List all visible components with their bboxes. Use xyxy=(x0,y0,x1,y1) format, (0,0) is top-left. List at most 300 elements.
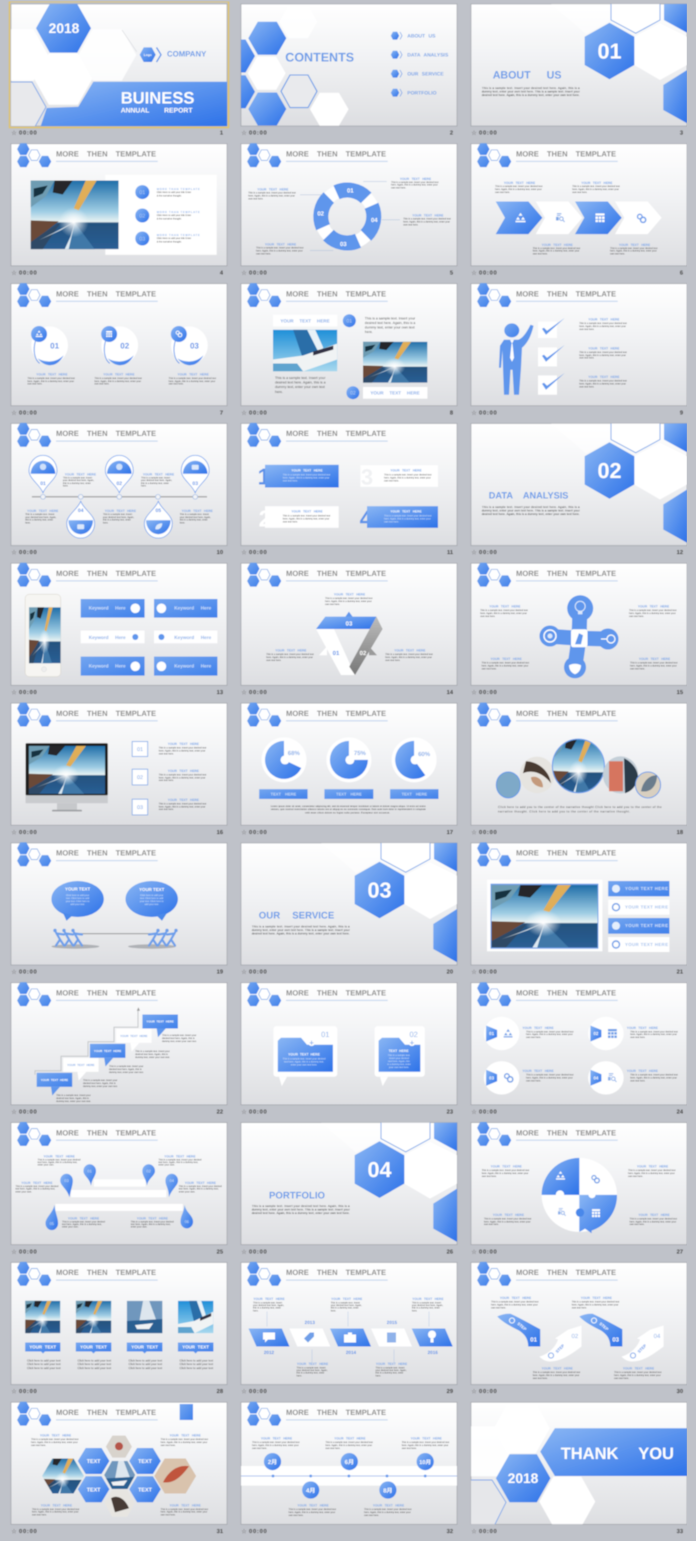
feature 03 xyxy=(484,1061,519,1094)
text block: this is a dummy text, enter xyxy=(253,1307,281,1310)
text block: own text here. xyxy=(325,603,340,606)
selection frame xyxy=(10,2,228,128)
card 2: own text here. xyxy=(283,520,298,524)
step notes 4 xyxy=(135,1050,170,1059)
slide footer xyxy=(472,1388,683,1395)
list item 02: MORE THAN TEMPLATE xyxy=(157,210,200,214)
slide footer: 00:00 xyxy=(19,270,37,276)
slide background xyxy=(241,284,457,406)
caption: narrative thought. Click here to add you to the center of the narrative thought. xyxy=(498,810,630,814)
slide footer: ☆ xyxy=(12,409,17,416)
ribbon step 04: 04 xyxy=(654,1333,661,1340)
text block: text here. Again, this is a dummy text, xyxy=(15,1188,55,1191)
text block: YOUR TEXT HERE xyxy=(253,1297,285,1301)
slide footer: 23 xyxy=(447,1109,453,1115)
text block: here. Again, this is a dummy text, enter your xyxy=(385,656,432,659)
hexagon cluster: TEXT xyxy=(87,1487,101,1493)
text block xyxy=(15,1181,59,1193)
text block xyxy=(248,188,296,200)
text block: YOUR TEXT HERE xyxy=(638,1213,670,1217)
text block: This is a sample text. Insert your desired text xyxy=(533,1371,580,1374)
number badge 02: 02 xyxy=(350,391,356,397)
text block: YOUR TEXT HERE xyxy=(297,1362,328,1366)
text block: This is a sample text. Insert your desired text xyxy=(159,773,207,776)
panel: slide 13 phone and buttons xyxy=(11,563,227,696)
paragraph right: here. xyxy=(365,330,373,334)
text block: This is a sample text. Insert xyxy=(25,513,55,516)
ribbon step 01 xyxy=(497,1314,540,1346)
text block: YOUR TEXT HERE xyxy=(412,1297,443,1301)
text block: text here. Again, this is a dummy text, xyxy=(131,1223,171,1226)
closing artwork xyxy=(470,1426,687,1525)
text block: enter your own. xyxy=(179,1190,196,1193)
step notes 3: This is a sample text. Insert your xyxy=(109,1065,144,1068)
panel: slide 33 thank you xyxy=(448,1402,687,1535)
slide footer: ☆ xyxy=(12,1248,17,1255)
card 1 xyxy=(258,464,339,490)
white band with axis xyxy=(241,1466,457,1486)
slide footer: 00:00 xyxy=(479,270,497,276)
slide footer: 10 xyxy=(217,550,223,556)
slide footer: 00:00 xyxy=(479,131,497,137)
text block: here. Again, this is a dummy text, enter your xyxy=(630,664,677,667)
text block: YOUR TEXT HERE xyxy=(588,375,619,379)
text block: here. xyxy=(103,521,109,524)
header hexagons xyxy=(17,563,51,587)
text block: this is a dummy text, enter xyxy=(376,1372,404,1375)
text block: This is a sample text. Insert your desired text xyxy=(159,802,207,805)
text block: enter your own. xyxy=(131,1226,148,1229)
text block: YOUR TEXT HERE xyxy=(588,318,619,322)
column 4: Click here to add your text xyxy=(180,1358,213,1362)
thank you title: THANK YOU xyxy=(561,1445,674,1463)
panel: slide 20 our service xyxy=(241,842,457,976)
card 3 xyxy=(360,464,438,490)
text block xyxy=(131,1216,174,1229)
header rule xyxy=(516,1000,618,1001)
text block xyxy=(579,375,627,388)
text block: YOUR TEXT HERE xyxy=(542,243,573,247)
text block: YOUR TEXT HERE xyxy=(489,605,520,609)
slide background xyxy=(241,983,457,1105)
text block: here. Again, this is a dummy text, enter your xyxy=(630,1076,677,1079)
text block xyxy=(403,214,451,226)
text block: own text here. xyxy=(579,328,595,331)
header rule xyxy=(286,440,388,442)
cross diagram xyxy=(540,595,618,678)
stair line xyxy=(35,1007,140,1075)
text block: own text here. xyxy=(630,1036,646,1039)
keyword button b2 xyxy=(154,631,217,643)
text block: here. Again, this is a dummy text, enter your xyxy=(27,380,74,383)
list item 01: Click Here to add your title Enter xyxy=(157,191,191,194)
speech bubble left: Click here to add your xyxy=(66,894,89,897)
slide footer: ☆ xyxy=(242,689,247,696)
chevron process xyxy=(496,202,662,234)
text block: here. Again, this is a dummy text, enter your xyxy=(169,380,215,383)
text block xyxy=(579,346,627,360)
slide footer: ☆ xyxy=(12,549,17,556)
card 1: here. Again, this is a dummy text, enter your xyxy=(283,476,330,480)
text block: here. Again, this is a dummy text, enter your xyxy=(526,1033,573,1036)
header rule xyxy=(516,860,618,861)
header rule xyxy=(516,1280,618,1281)
text block xyxy=(522,1026,574,1039)
header rule xyxy=(516,1140,618,1141)
text block: YOUR TEXT HERE xyxy=(581,1296,612,1300)
slide footer: 1 xyxy=(220,131,223,137)
keyword button a1 xyxy=(81,599,145,618)
pin 02: 02 xyxy=(117,481,122,487)
pin 03 xyxy=(181,455,209,493)
card 4: YOUR TEXT HERE xyxy=(390,510,422,514)
feature 01 xyxy=(484,1017,519,1050)
slide footer: 00:00 xyxy=(249,550,267,556)
text block: your desired text here. Again, xyxy=(25,516,57,519)
text block: here. xyxy=(412,1309,418,1312)
text block: This is a sample text. Insert xyxy=(296,1366,326,1369)
slide footer: 00:00 xyxy=(479,1389,497,1395)
triangle diagram: 03 xyxy=(346,620,353,627)
label box top xyxy=(273,315,337,326)
header hexagons xyxy=(477,703,511,726)
ribbon step 03: 03 xyxy=(612,1336,620,1344)
step 3: YOUR TEXT HERE xyxy=(94,1049,121,1053)
text block xyxy=(491,1296,539,1310)
text block: YOUR TEXT HERE xyxy=(168,769,199,773)
slide footer: ☆ xyxy=(12,829,17,836)
header rule xyxy=(286,1280,388,1281)
slide footer: 00:00 xyxy=(19,830,37,836)
month 6 xyxy=(341,1453,358,1470)
header rule xyxy=(56,860,158,861)
triangle diagram: 01 xyxy=(333,650,340,657)
text block: YOUR TEXT HERE xyxy=(411,1437,442,1441)
slide footer xyxy=(242,1108,453,1116)
text block: own text here. xyxy=(159,808,174,811)
folder card 01 xyxy=(273,1026,337,1086)
month 6: 6月 xyxy=(345,1459,354,1466)
slide footer: ☆ xyxy=(242,270,247,276)
slide footer: 00:00 xyxy=(479,970,497,976)
text block: YOUR TEXT HERE xyxy=(170,1434,201,1438)
step notes 4: dummy text, enter your own text. xyxy=(135,1056,170,1059)
text block: here. Again, this is a dummy text, enter your xyxy=(325,1444,372,1447)
slide footer xyxy=(242,270,453,276)
pin 01 xyxy=(29,455,57,493)
slide footer xyxy=(12,130,223,137)
text block: YOUR TEXT HERE xyxy=(493,1213,524,1217)
slide background xyxy=(471,1262,687,1384)
slide background xyxy=(471,424,687,546)
text block: here. Again, this is a dummy text, enter your xyxy=(482,1172,529,1175)
photo left xyxy=(273,330,337,371)
slide footer: ☆ xyxy=(472,689,477,696)
slide background xyxy=(11,144,227,266)
slide footer xyxy=(12,829,223,836)
panel: slide 32 month timeline xyxy=(241,1402,457,1535)
text block: here. Again, this is a dummy text, enter your xyxy=(159,776,206,779)
text block: enter your own. xyxy=(158,1164,175,1167)
slide footer: 27 xyxy=(677,1249,683,1255)
slide footer: ☆ xyxy=(12,130,17,137)
slide footer: ☆ xyxy=(12,1108,17,1115)
slide background xyxy=(241,703,457,825)
text block: This is a sample text. Insert your desired text xyxy=(288,1508,336,1511)
text block: your desired text here. Again, xyxy=(253,1304,284,1307)
text block: here. Again, this is a dummy text, enter your xyxy=(628,1172,675,1175)
text block: enter your own. xyxy=(62,1226,79,1229)
text block: YOUR TEXT HERE xyxy=(257,188,288,192)
slide footer: 00:00 xyxy=(249,131,267,137)
text block: here. Again, this is a dummy text, enter your xyxy=(629,612,676,615)
ribbon step 04 xyxy=(622,1326,664,1362)
step 1 xyxy=(37,1073,72,1096)
slide background xyxy=(241,144,457,266)
paragraph left: desired text here. Again, this is a xyxy=(275,381,326,385)
pin 02 xyxy=(105,455,133,493)
column 3: Click here to add your text xyxy=(128,1366,162,1370)
folder card 02: is a dummy text, enter xyxy=(387,1063,411,1066)
number box 03: 03 xyxy=(137,805,143,811)
pin 06 xyxy=(180,1205,193,1228)
slide background xyxy=(11,424,227,546)
pin 03: 03 xyxy=(192,481,198,487)
column 4 xyxy=(178,1301,213,1370)
slide footer: 25 xyxy=(217,1249,223,1255)
slide footer: 00:00 xyxy=(479,1529,497,1535)
slide footer: 00:00 xyxy=(479,1109,497,1115)
step notes 3 xyxy=(109,1065,144,1074)
text block: own text here. xyxy=(533,253,548,256)
column 3: Click here to add your text xyxy=(128,1358,162,1362)
section hexagons xyxy=(354,1122,458,1242)
slide footer xyxy=(242,549,453,556)
year label: 2018 xyxy=(508,1471,539,1486)
month 8: 8月 xyxy=(383,1487,393,1494)
text block xyxy=(402,1437,449,1450)
text block xyxy=(364,1504,412,1517)
text block xyxy=(179,1181,222,1193)
text block xyxy=(533,1366,580,1380)
header title: MORE THEN TEMPLATE xyxy=(56,849,156,858)
text block: YOUR TEXT HERE xyxy=(627,1069,658,1073)
tug of war xyxy=(51,929,178,949)
text block xyxy=(630,657,678,670)
header rule xyxy=(286,580,388,582)
column 1: YOUR TEXT xyxy=(29,1345,56,1350)
header title: MORE THEN TEMPLATE xyxy=(516,988,616,997)
panel: slide 8 photos and text xyxy=(241,283,457,416)
number badge 02 xyxy=(346,386,359,399)
panel: slide 5 ring diagram xyxy=(241,143,457,276)
text block xyxy=(159,769,207,782)
text block: here. Again, this is a dummy text, enter your xyxy=(495,188,542,191)
header title: MORE THEN TEMPLATE xyxy=(56,150,156,159)
text block: here. Again, this is a dummy text, enter your xyxy=(484,1220,531,1223)
ribbon step 02 xyxy=(539,1326,582,1362)
panel: slide 30 step ribbons xyxy=(471,1262,687,1395)
text block: here. Again, this is a dummy text, enter your xyxy=(325,600,372,603)
slide footer: 00:00 xyxy=(19,1249,37,1255)
parallelogram steps xyxy=(248,1328,453,1346)
month 2 xyxy=(264,1453,281,1470)
header rule xyxy=(516,161,618,162)
section text: desired text here. Again, this is a dummy text, enter your own text here. xyxy=(252,932,350,936)
slide footer xyxy=(12,1108,223,1116)
text block: YOUR TEXT HERE xyxy=(639,657,670,661)
keyword button a1: Keyword Here xyxy=(89,605,126,610)
panel: slide 6 chevrons xyxy=(471,143,687,276)
slide footer: ☆ xyxy=(472,1108,477,1115)
section text: This is a sample text. Insert your desired text here. Again, this is a xyxy=(482,86,580,90)
month 4: 4月 xyxy=(306,1487,315,1494)
slide footer xyxy=(242,829,453,836)
photo circle 2 xyxy=(520,757,555,793)
folder card 02: text here. Again, this xyxy=(388,1060,411,1063)
slide footer: ☆ xyxy=(472,270,477,276)
logo badge: Logo xyxy=(144,53,152,57)
speech bubble left: add your text. xyxy=(70,903,85,906)
header hexagons xyxy=(17,1402,51,1426)
text block: own text here. xyxy=(391,187,406,190)
column 4: YOUR TEXT xyxy=(182,1345,209,1350)
section number: 04 xyxy=(367,1157,392,1182)
header title: MORE THEN TEMPLATE xyxy=(516,1268,616,1277)
menu bar 2: YOUR TEXT HERE xyxy=(625,905,668,910)
text block: here. Again, this is a dummy text, enter your xyxy=(614,1374,661,1377)
cover title: BUINESS xyxy=(121,88,194,107)
header title: MORE THEN TEMPLATE xyxy=(516,849,616,858)
slide footer: ☆ xyxy=(12,1528,17,1535)
text block: YOUR TEXT HERE xyxy=(491,1165,522,1169)
text block: here. Again, this is a dummy text, enter your xyxy=(572,188,619,191)
text block: This is a sample text. Insert your desired text xyxy=(161,1438,208,1441)
icon: presenter figure xyxy=(499,323,534,395)
text block: own text here. xyxy=(572,1307,587,1310)
slide footer: 33 xyxy=(677,1529,683,1535)
list item 03 xyxy=(135,232,200,246)
text block xyxy=(579,318,627,331)
ribbon step 02: STEP xyxy=(554,1343,566,1354)
number box 03 xyxy=(132,799,148,815)
slide footer: 16 xyxy=(217,830,223,836)
slide footer: 00:00 xyxy=(19,131,37,137)
card 3: own text here. xyxy=(384,480,399,482)
menu item: portfolio xyxy=(391,89,437,97)
header rule xyxy=(56,440,158,442)
slide background xyxy=(11,1123,227,1245)
slide footer: 00:00 xyxy=(19,970,37,976)
slide footer: 3 xyxy=(680,131,683,137)
text block: YOUR TEXT HERE xyxy=(41,1503,72,1507)
card 2: This is a sample text. Insert your desired text xyxy=(283,514,331,518)
section text: desired text here. Again, this is a dummy text, enter your own text here. xyxy=(482,93,580,97)
slide footer: ☆ xyxy=(472,130,477,137)
feature 01: 01 xyxy=(489,1031,495,1036)
ring diagram: 02 xyxy=(317,210,325,217)
text block: here. Again, this is a dummy text, enter your xyxy=(533,1374,580,1377)
slide footer: ☆ xyxy=(242,969,247,976)
text block xyxy=(325,593,373,606)
text block: own text here. xyxy=(482,667,497,670)
folder card 02: TEXT HERE xyxy=(389,1049,409,1053)
text block: This is a sample text. Insert your desired text xyxy=(629,609,677,612)
text block: YOUR TEXT HERE xyxy=(265,242,296,246)
list item 03: MORE THAN TEMPLATE xyxy=(157,233,200,237)
folder card 01: This is a sample text. Insert your desired xyxy=(283,1057,326,1060)
panel: slide 18 photo circles xyxy=(471,703,687,836)
section hexagons xyxy=(551,3,687,123)
text block xyxy=(266,649,314,662)
header title: MORE THEN TEMPLATE xyxy=(286,429,386,438)
slide background xyxy=(241,4,457,126)
text block: here. xyxy=(25,521,31,524)
text block: here. Again, this is a dummy text, enter your xyxy=(579,354,626,357)
text block xyxy=(572,1296,620,1310)
text block: YOUR TEXT HERE xyxy=(331,1297,362,1301)
card 4: here. Again, this is a dummy text, enter your xyxy=(384,518,431,520)
text block: text here. Again, this is a dummy text, xyxy=(179,1188,219,1191)
text block: own text here. xyxy=(630,1223,645,1226)
slide footer: 00:00 xyxy=(479,690,497,696)
text block xyxy=(495,181,543,194)
text block: This is a sample text. Insert your desired text xyxy=(630,661,678,664)
text block: your desired text here. Again, xyxy=(331,1304,362,1307)
puzzle circle xyxy=(542,1158,617,1233)
text block: YOUR TEXT HERE xyxy=(170,1503,201,1507)
slide footer: 00:00 xyxy=(249,1249,267,1255)
text block xyxy=(628,1165,676,1178)
header hexagons xyxy=(17,143,51,167)
number box 01: 01 xyxy=(137,747,143,753)
slide footer: 11 xyxy=(447,550,453,556)
month 2: 2月 xyxy=(268,1459,277,1466)
card 3: here. Again, this is a dummy text, enter your xyxy=(384,476,431,480)
text block: own text here. xyxy=(161,1514,176,1517)
text block: own text here. xyxy=(491,1307,506,1310)
slide footer: ☆ xyxy=(242,549,247,556)
keyword button b3: Keyword Here xyxy=(174,663,212,668)
header title: MORE THEN TEMPLATE xyxy=(56,1268,156,1277)
slide footer: ☆ xyxy=(242,1108,247,1115)
text block: own text here. xyxy=(482,1175,497,1178)
text block: this is a dummy text, enter xyxy=(296,1372,325,1375)
card 1: own text here. xyxy=(283,480,298,482)
step notes 1: dummy text, enter your own text. xyxy=(56,1100,91,1103)
slide background xyxy=(471,4,687,126)
slide footer xyxy=(242,1248,453,1255)
text block: This is a sample text. Insert your desired text xyxy=(572,185,620,188)
slide footer: ☆ xyxy=(12,689,17,696)
year 2012: 2012 xyxy=(264,1350,275,1355)
keyword button b3 xyxy=(154,657,217,676)
step 2 xyxy=(63,1058,99,1080)
text block: own text here. xyxy=(526,1079,541,1082)
folder card 01: enter your own text here. xyxy=(291,1063,318,1066)
text block xyxy=(25,509,58,524)
text block: own text here. xyxy=(288,1514,304,1517)
text block: here. Again, this is a dummy text, enter your xyxy=(579,325,626,328)
step 1: YOUR TEXT HERE xyxy=(41,1078,68,1082)
step notes 4: This is a sample text. Insert your xyxy=(135,1050,170,1053)
list item 01: & the narrative thought. xyxy=(157,194,182,197)
text block xyxy=(296,1362,328,1377)
keyword button a3: Keyword Here xyxy=(89,663,126,668)
header title: MORE THEN TEMPLATE xyxy=(286,1408,386,1417)
hexagon cluster xyxy=(240,21,348,126)
badge 01: 01 xyxy=(50,341,60,350)
